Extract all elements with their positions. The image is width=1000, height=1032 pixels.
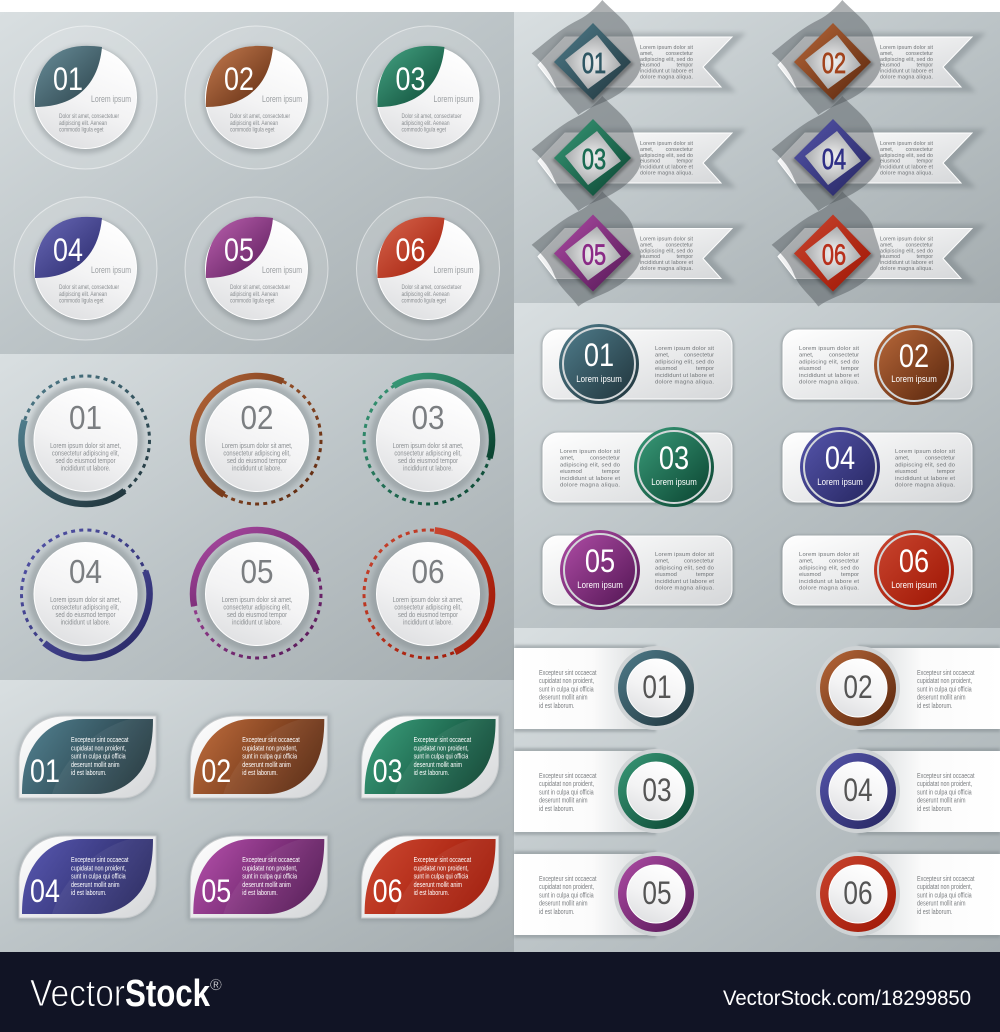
pill card 05: amet,: [655, 559, 670, 565]
ribbon 06: amet,: [880, 242, 893, 248]
ring circle 05: 05: [240, 554, 274, 590]
panel: leaf cards background: [0, 680, 514, 952]
ring circle 02: 02: [240, 400, 274, 436]
ring circle 03: incididunt ut labore.: [403, 465, 453, 473]
pill card 04: tempor: [937, 469, 955, 475]
ribbon 03: adipiscing elit, sed do: [640, 153, 693, 159]
leaf card 01: cupidatat non proident,: [71, 745, 126, 753]
glass circle 01: adipiscing elit. Aenean: [59, 120, 107, 127]
leaf card 04: [19, 836, 156, 918]
glass circle 05: Dolor sit amet, consectetuer: [230, 285, 290, 291]
pill card 04: Lorem ipsum: [817, 476, 863, 487]
strip 03: sunt in culpa qui officia: [539, 789, 594, 797]
strip 02: id est laborum.: [917, 702, 953, 710]
ribbon 04: incididunt ut labore et: [880, 165, 934, 171]
ribbon 03: incididunt ut labore et: [640, 165, 694, 171]
ribbon 05: incididunt ut labore et: [640, 260, 694, 266]
strip 06: Excepteur sint occaecat: [917, 875, 975, 883]
pill card 05: Lorem ipsum: [577, 579, 623, 590]
ring circle 05: sed do eiusmod tempor: [227, 611, 288, 619]
glass circle 03: 03: [396, 62, 425, 98]
pill card 02: Lorem ipsum dolor sit: [799, 346, 859, 352]
glass circle 05: Lorem ipsum: [262, 265, 302, 275]
ring circle 06: [364, 530, 492, 658]
ring circle 04: 04: [69, 554, 102, 590]
ring circle 06: 06: [411, 554, 445, 590]
pill card 01: tempor: [696, 366, 714, 372]
ribbon 05: amet,: [640, 242, 653, 248]
strip 02: sunt in culpa qui officia: [917, 686, 972, 694]
glass circle 05: commodo ligula eget: [230, 298, 275, 305]
leaf card 06: 06: [373, 874, 403, 910]
pill card 06: eiusmod: [799, 572, 821, 578]
strip 01: Excepteur sint occaecat: [539, 669, 597, 677]
ribbon 02: Lorem ipsum dolor sit: [880, 45, 934, 51]
leaf card 06: cupidatat non proident,: [414, 865, 469, 873]
ring circle 03: Lorem ipsum dolor sit amet,: [393, 442, 464, 450]
pill card 02: 02: [899, 339, 929, 375]
pill card 06: Lorem ipsum dolor sit: [799, 552, 859, 558]
glass circle 03: adipiscing elit. Aenean: [402, 120, 450, 127]
ribbon 04: consectetur: [906, 147, 933, 153]
ribbon 01: consectetur: [666, 51, 693, 57]
pill card 05: tempor: [696, 572, 714, 578]
strip 06: id est laborum.: [917, 908, 953, 916]
glass circle 01: Lorem ipsum: [91, 94, 131, 104]
pill card 01: consectetur: [684, 353, 714, 359]
strip 05: cupidatat non proident,: [539, 884, 594, 891]
ring circle 02: [193, 376, 321, 504]
glass circle 02: Dolor sit amet, consectetuer: [230, 114, 290, 120]
pill card 02: tempor: [841, 366, 859, 372]
strip 03: Excepteur sint occaecat: [539, 772, 597, 780]
strip 04: id est laborum.: [917, 805, 953, 813]
ribbon 02: adipiscing elit, sed do: [880, 57, 933, 63]
pill card 02: Lorem ipsum: [891, 373, 937, 384]
ribbon 06: tempor: [916, 254, 933, 260]
ring circle 03: sed do eiusmod tempor: [398, 457, 459, 465]
pill card 01: [541, 324, 734, 404]
leaf card 04: 04: [30, 874, 60, 910]
ring circle 06: Lorem ipsum dolor sit amet,: [393, 596, 464, 604]
strip 06: [816, 851, 1000, 938]
glass circle 02: Lorem ipsum: [262, 94, 302, 104]
glass circle 03: commodo ligula eget: [402, 127, 446, 134]
pill card 06: amet,: [799, 559, 814, 565]
ribbon 02: [772, 0, 986, 115]
leaf card 01: deserunt mollit anim: [71, 761, 119, 769]
ring circle 04: [22, 530, 150, 658]
strip 01: deserunt mollit anim: [539, 694, 587, 702]
ring circle 02: Lorem ipsum dolor sit amet,: [222, 442, 293, 450]
ribbon 05: Lorem ipsum dolor sit: [640, 236, 694, 242]
logo: [30, 973, 222, 1015]
strip 06: sunt in culpa qui officia: [917, 892, 972, 900]
leaf card 01: id est laborum.: [71, 770, 107, 777]
logo: Vector: [30, 973, 125, 1015]
panel: dashed rings background: [0, 354, 514, 680]
leaf card 02: id est laborum.: [242, 770, 278, 777]
leaf card 05: id est laborum.: [242, 890, 278, 897]
pill card 04: consectetur: [925, 456, 955, 462]
pill card 05: 05: [585, 544, 615, 580]
glass circle 02: [185, 26, 328, 169]
glass circle 01: Dolor sit amet, consectetuer: [59, 114, 119, 120]
pill card 04: Lorem ipsum dolor sit: [895, 449, 955, 455]
pill card 04: adipiscing elit, sed do: [895, 462, 955, 468]
ring circle 05: [193, 530, 321, 658]
leaf card 01: Excepteur sint occaecat: [71, 736, 129, 744]
ribbon 04: dolore magna aliqua.: [880, 170, 933, 176]
ribbon 04: tempor: [916, 159, 933, 165]
ribbon 01: amet,: [640, 51, 653, 57]
ring circle 05: consectetur adipiscing elit,: [223, 604, 291, 612]
glass circle 01: 01: [53, 62, 83, 98]
pill card 03: amet,: [560, 456, 575, 462]
leaf card 01: [19, 716, 156, 798]
strip 05: deserunt mollit anim: [539, 900, 587, 908]
strip 05: id est laborum.: [539, 908, 575, 916]
footer url: VectorStock.com/18299850: [723, 987, 971, 1010]
ribbon 02: tempor: [916, 63, 933, 69]
pill card 06: incididunt ut labore et: [799, 579, 859, 585]
strip 05: 05: [642, 877, 672, 912]
leaf card 06: [362, 836, 499, 918]
leaf card 03: id est laborum.: [414, 770, 449, 777]
pill card 02: amet,: [799, 353, 814, 359]
pill card 03: dolore magna aliqua.: [560, 482, 620, 488]
ring circle 01: consectetur adipiscing elit,: [52, 450, 119, 458]
ribbon 06: dolore magna aliqua.: [880, 266, 933, 272]
leaf card 02: [190, 716, 327, 798]
glass circle 03: [356, 26, 500, 169]
ribbon 01: eiusmod: [640, 63, 660, 69]
ribbon 06: consectetur: [906, 242, 933, 248]
ribbon 05: 05: [582, 240, 606, 271]
strip 02: 02: [843, 671, 873, 706]
pill card 02: [781, 325, 974, 405]
ring circle 02: incididunt ut labore.: [232, 465, 282, 473]
leaf card 04: deserunt mollit anim: [71, 881, 119, 889]
ribbon 03: eiusmod: [640, 159, 660, 165]
ribbon 02: incididunt ut labore et: [880, 69, 934, 75]
leaf card 03: cupidatat non proident,: [414, 745, 469, 753]
ring circle 06: consectetur adipiscing elit,: [394, 604, 462, 612]
pill card 01: 01: [584, 338, 614, 374]
pill card 01: dolore magna aliqua.: [655, 380, 714, 386]
pill card 04: 04: [825, 441, 855, 477]
leaf card 01: 01: [30, 754, 60, 790]
ribbon 05: tempor: [676, 254, 693, 260]
leaf card 06: id est laborum.: [414, 890, 449, 897]
strip 03: [514, 748, 698, 835]
pill card 05: eiusmod: [655, 572, 677, 578]
ribbon 03: [532, 96, 746, 211]
pill card 05: consectetur: [684, 559, 714, 565]
ribbon 06: 06: [822, 240, 846, 271]
pill card 05: [541, 530, 734, 610]
ribbon 05: adipiscing elit, sed do: [640, 248, 693, 254]
ribbon 02: consectetur: [906, 51, 933, 57]
glass circle 01: [14, 26, 157, 169]
ribbon 04: adipiscing elit, sed do: [880, 153, 933, 159]
strip 06: 06: [843, 877, 873, 912]
pill card 05: dolore magna aliqua.: [655, 586, 714, 592]
glass circle 02: adipiscing elit. Aenean: [230, 120, 278, 127]
ring circle 04: sed do eiusmod tempor: [55, 611, 116, 619]
ribbon 05: dolore magna aliqua.: [640, 266, 693, 272]
pill card 01: adipiscing elit, sed do: [655, 359, 714, 365]
ribbon 01: dolore magna aliqua.: [640, 74, 693, 80]
glass circle 06: adipiscing elit. Aenean: [402, 291, 450, 298]
ribbon 04: 04: [822, 144, 846, 176]
glass circle 04: [14, 197, 157, 340]
strip 01: cupidatat non proident,: [539, 678, 594, 685]
ribbon 05: eiusmod: [640, 254, 660, 260]
ribbon 02: amet,: [880, 51, 893, 57]
glass circle 03: Lorem ipsum: [434, 94, 474, 104]
glass circle 04: adipiscing elit. Aenean: [59, 291, 107, 298]
glass circle 03: Dolor sit amet, consectetuer: [402, 114, 462, 120]
ring circle 01: [21, 376, 150, 504]
pill card 04: [781, 427, 974, 507]
ribbon 06: incididunt ut labore et: [880, 260, 934, 266]
strip 02: Excepteur sint occaecat: [917, 669, 975, 677]
strip 06: cupidatat non proident,: [917, 884, 972, 891]
leaf card 02: Excepteur sint occaecat: [242, 736, 300, 744]
ribbon 01: [532, 0, 746, 115]
ribbon 01: Lorem ipsum dolor sit: [640, 45, 694, 51]
strip 01: 01: [642, 671, 672, 706]
leaf card 05: 05: [201, 874, 231, 910]
leaf card 02: 02: [201, 754, 231, 790]
strip 04: sunt in culpa qui officia: [917, 789, 972, 797]
glass circle 06: Dolor sit amet, consectetuer: [402, 285, 462, 291]
ribbon 03: amet,: [640, 147, 653, 153]
glass circle 06: [356, 197, 500, 340]
strip 05: [514, 851, 698, 938]
pill card 01: Lorem ipsum: [576, 373, 622, 384]
pill card 03: tempor: [602, 469, 620, 475]
leaf card 06: deserunt mollit anim: [414, 881, 462, 889]
ring circle 04: consectetur adipiscing elit,: [52, 604, 119, 612]
strip 04: deserunt mollit anim: [917, 797, 965, 805]
pill card 06: [781, 530, 974, 610]
pill card 02: incididunt ut labore et: [799, 373, 859, 379]
pill card 06: Lorem ipsum: [891, 579, 937, 590]
pill card 02: eiusmod: [799, 366, 821, 372]
strip 02: [816, 645, 1000, 732]
ribbon 01: 01: [582, 48, 606, 80]
ribbon 02: dolore magna aliqua.: [880, 74, 933, 80]
ribbon 01: adipiscing elit, sed do: [640, 57, 693, 63]
ribbon 04: eiusmod: [880, 159, 900, 165]
leaf card 03: sunt in culpa qui officia: [414, 753, 469, 761]
pill card 06: consectetur: [829, 559, 859, 565]
ribbon 06: eiusmod: [880, 254, 900, 260]
leaf card 05: Excepteur sint occaecat: [242, 856, 300, 864]
ribbon 03: dolore magna aliqua.: [640, 170, 693, 176]
ribbon 06: [772, 192, 986, 306]
leaf card 04: id est laborum.: [71, 890, 107, 897]
strip 02: deserunt mollit anim: [917, 694, 965, 702]
strip 05: Excepteur sint occaecat: [539, 875, 597, 883]
pill card 01: amet,: [655, 353, 670, 359]
ring circle 03: [364, 376, 492, 504]
leaf card 06: sunt in culpa qui officia: [414, 873, 469, 881]
strip 03: 03: [642, 774, 672, 809]
pill card 05: Lorem ipsum dolor sit: [655, 552, 714, 558]
ribbon 04: amet,: [880, 147, 893, 153]
leaf card 06: Excepteur sint occaecat: [414, 856, 471, 864]
strip 04: cupidatat non proident,: [917, 781, 972, 788]
ribbon 03: tempor: [676, 159, 693, 165]
pill card 02: adipiscing elit, sed do: [799, 359, 859, 365]
ring circle 06: incididunt ut labore.: [403, 619, 453, 627]
glass circle 06: 06: [396, 233, 425, 269]
pill card 03: adipiscing elit, sed do: [560, 462, 620, 468]
glass circle 04: 04: [53, 233, 83, 269]
ring circle 02: sed do eiusmod tempor: [227, 457, 288, 465]
leaf card 04: cupidatat non proident,: [71, 865, 126, 873]
pill card 04: incididunt ut labore et: [895, 476, 955, 482]
leaf card 03: 03: [373, 754, 403, 790]
pill card 03: Lorem ipsum: [651, 476, 697, 487]
panel: strips background: [514, 628, 1000, 952]
ring circle 05: Lorem ipsum dolor sit amet,: [222, 596, 293, 604]
pill card 03: incididunt ut labore et: [560, 476, 620, 482]
ring circle 02: consectetur adipiscing elit,: [223, 450, 291, 458]
pill card 02: dolore magna aliqua.: [799, 380, 859, 386]
pill card 02: consectetur: [829, 353, 859, 359]
ring circle 04: Lorem ipsum dolor sit amet,: [50, 596, 121, 604]
ribbon 05: consectetur: [666, 242, 693, 248]
pill card 05: incididunt ut labore et: [655, 579, 714, 585]
panel: glass circles background: [0, 12, 514, 354]
pill card 03: consectetur: [590, 456, 620, 462]
panel: ribbons background: [514, 12, 1000, 303]
leaf card 02: deserunt mollit anim: [242, 761, 291, 769]
ribbon 02: eiusmod: [880, 63, 900, 69]
leaf card 01: sunt in culpa qui officia: [71, 753, 126, 761]
pill card 01: Lorem ipsum dolor sit: [655, 346, 714, 352]
glass circle 01: commodo ligula eget: [59, 127, 104, 134]
glass circle 05: adipiscing elit. Aenean: [230, 291, 278, 298]
ring circle 01: Lorem ipsum dolor sit amet,: [50, 442, 121, 450]
ring circle 03: consectetur adipiscing elit,: [394, 450, 462, 458]
ribbon 06: adipiscing elit, sed do: [880, 248, 933, 254]
panel: pill cards background: [514, 303, 1000, 628]
ribbon 04: Lorem ipsum dolor sit: [880, 141, 934, 147]
pill card 01: eiusmod: [655, 366, 677, 372]
strip 04: 04: [843, 774, 873, 809]
pill card 04: dolore magna aliqua.: [895, 482, 955, 488]
strip 01: id est laborum.: [539, 702, 575, 710]
leaf card 03: [362, 716, 499, 798]
glass circle 04: Dolor sit amet, consectetuer: [59, 285, 119, 291]
ring circle 01: incididunt ut labore.: [61, 465, 111, 473]
pill card 06: adipiscing elit, sed do: [799, 565, 859, 571]
glass circle 04: Lorem ipsum: [91, 265, 131, 275]
leaf card 04: sunt in culpa qui officia: [71, 873, 126, 881]
pill card 06: 06: [899, 544, 929, 580]
strip 03: cupidatat non proident,: [539, 781, 594, 788]
white page top strip: [0, 0, 1000, 12]
logo: ®: [210, 977, 222, 994]
pill card 01: incididunt ut labore et: [655, 373, 714, 379]
pill card 04: eiusmod: [895, 469, 917, 475]
ring circle 04: incididunt ut labore.: [61, 619, 111, 627]
logo: Stock: [125, 973, 211, 1015]
pill card 06: dolore magna aliqua.: [799, 586, 859, 592]
leaf card 05: cupidatat non proident,: [242, 865, 298, 873]
ribbon 03: 03: [582, 144, 606, 176]
strip 02: cupidatat non proident,: [917, 678, 972, 685]
ribbon 06: Lorem ipsum dolor sit: [880, 236, 934, 242]
ribbon 03: Lorem ipsum dolor sit: [640, 141, 694, 147]
ribbon 01: incididunt ut labore et: [640, 69, 694, 75]
ribbon 04: [772, 96, 986, 211]
strip 03: deserunt mollit anim: [539, 797, 587, 805]
pill card 05: adipiscing elit, sed do: [655, 565, 714, 571]
strip 01: sunt in culpa qui officia: [539, 686, 594, 694]
leaf card 04: Excepteur sint occaecat: [71, 856, 129, 864]
pill card 06: tempor: [841, 572, 859, 578]
ring circle 05: incididunt ut labore.: [232, 619, 282, 627]
pill card 03: [541, 427, 734, 507]
glass circle 02: 02: [224, 62, 254, 98]
leaf card 05: [190, 836, 327, 918]
strip 04: Excepteur sint occaecat: [917, 772, 975, 780]
pill card 03: eiusmod: [560, 469, 582, 475]
ring circle 06: sed do eiusmod tempor: [398, 611, 459, 619]
leaf card 02: sunt in culpa qui officia: [242, 753, 297, 761]
glass circle 06: commodo ligula eget: [402, 298, 446, 305]
strip 06: deserunt mollit anim: [917, 900, 965, 908]
glass circle 04: commodo ligula eget: [59, 298, 104, 305]
pill card 03: Lorem ipsum dolor sit: [560, 449, 620, 455]
ribbon 02: 02: [822, 48, 846, 80]
ribbon 03: consectetur: [666, 147, 693, 153]
ring circle 01: sed do eiusmod tempor: [55, 457, 116, 465]
strip 01: [514, 645, 698, 732]
pill card 03: 03: [659, 441, 689, 477]
glass circle 02: commodo ligula eget: [230, 127, 275, 134]
strip 05: sunt in culpa qui officia: [539, 892, 594, 900]
leaf card 03: deserunt mollit anim: [414, 761, 462, 769]
strip 04: [816, 748, 1000, 835]
glass circle 05: 05: [224, 233, 254, 269]
strip 03: id est laborum.: [539, 805, 575, 813]
leaf card 03: Excepteur sint occaecat: [414, 736, 471, 744]
ring circle 01: 01: [69, 400, 102, 436]
leaf card 05: sunt in culpa qui officia: [242, 873, 297, 881]
leaf card 02: cupidatat non proident,: [242, 745, 298, 753]
ring circle 03: 03: [411, 400, 445, 436]
glass circle 05: [185, 197, 328, 340]
ribbon 05: [532, 192, 746, 306]
glass circle 06: Lorem ipsum: [434, 265, 474, 275]
footer bar: [0, 952, 1000, 1032]
leaf card 05: deserunt mollit anim: [242, 881, 291, 889]
ribbon 01: tempor: [676, 63, 693, 69]
pill card 04: amet,: [895, 456, 910, 462]
